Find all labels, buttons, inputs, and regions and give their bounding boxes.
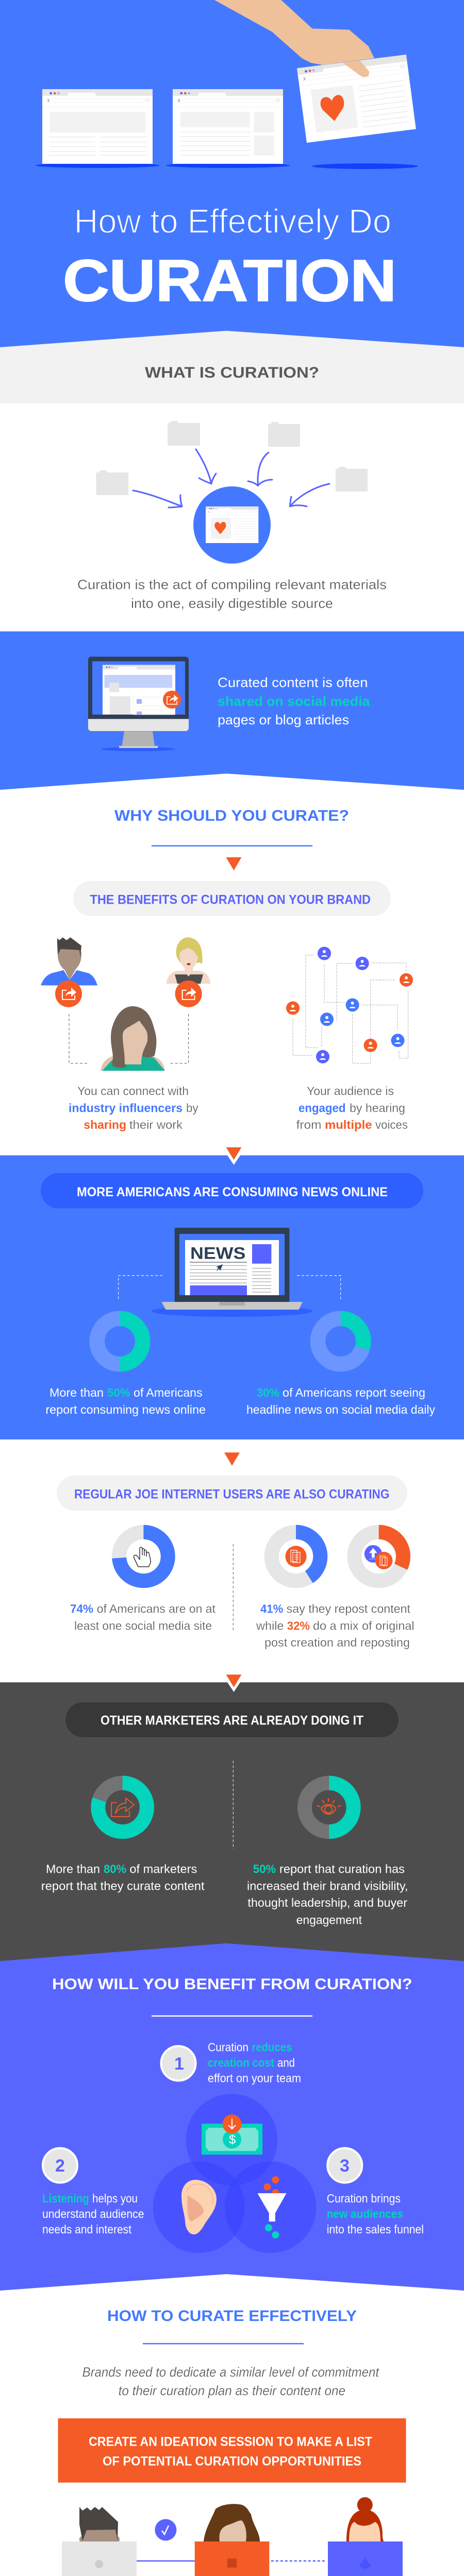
- panel: how will you benefit: [0, 1943, 464, 2291]
- pill: regular joe heading: [57, 1476, 407, 1511]
- chart: 32 percent donut: [354, 1532, 403, 1581]
- text: audience: Your audience is: [307, 1084, 394, 1097]
- arrow: down triangle: [226, 1674, 241, 1692]
- text: news stats: of Americans report seeing: [283, 1386, 425, 1399]
- icon: folders: [96, 421, 368, 495]
- illustration: publishers and you: [57, 2497, 407, 2576]
- icon: redhead at laptop: [323, 2497, 407, 2576]
- text: marketers stats: report that curation has: [279, 1862, 405, 1875]
- banner: ideation session: OF POTENTIAL CURATION OPPORTUNITIES: [103, 2454, 361, 2469]
- icon: share badges: [55, 980, 202, 1007]
- text: commitment note: [82, 2364, 380, 2398]
- icon: ear: [181, 2180, 217, 2234]
- heading: what is curation: WHAT IS CURATION?: [145, 364, 319, 381]
- icon: eye: [317, 1798, 341, 1814]
- text: influencers: sharing: [84, 1118, 126, 1131]
- benefit: number one: creation cost: [208, 2056, 274, 2069]
- text: regular joe stats: least one social media site: [74, 1619, 212, 1632]
- icon: browser window two: [173, 89, 283, 164]
- text: shared on social: Curated content is often: [218, 675, 368, 690]
- pill: benefits heading: [73, 881, 391, 916]
- benefit: number one: and: [277, 2056, 295, 2069]
- icon: pointer hand: [134, 1547, 151, 1567]
- text: commitment note: Brands need to dedicate a similar level of commitment: [82, 2364, 380, 2380]
- panel: hero background: [0, 0, 464, 403]
- text: marketers stats: engagement: [296, 1913, 362, 1927]
- icon: page in circle: [193, 486, 271, 564]
- icon: check badge: [155, 2519, 176, 2541]
- text: audience: voices: [375, 1118, 408, 1131]
- title: [63, 202, 396, 314]
- text: audience: [296, 1084, 408, 1131]
- text: marketers stats: 80%: [104, 1862, 126, 1875]
- icon: you woman: [101, 1006, 165, 1071]
- icon: share outline: [111, 1798, 134, 1817]
- text: news stats: [45, 1386, 435, 1416]
- chart: 41 percent donut: [272, 1532, 320, 1581]
- text: news stats: of Americans: [134, 1386, 203, 1399]
- pill: news heading: [41, 1173, 423, 1208]
- icon: hand palm: [214, 0, 374, 65]
- text: influencers: [69, 1084, 198, 1131]
- benefit: number one: 1: [174, 2054, 184, 2074]
- icon: money bill: [202, 2114, 262, 2155]
- benefit: number three: 3: [340, 2156, 350, 2176]
- text: regular joe stats: say they repost content: [287, 1602, 411, 1615]
- icon: blonde influencer: [167, 937, 210, 984]
- benefit: number three: [327, 2148, 424, 2236]
- panel: why should you curate: [41, 807, 413, 1131]
- panel: other marketers: [0, 1674, 464, 1961]
- benefit: number one: Curation: [208, 2040, 248, 2054]
- icon: finger: [343, 61, 369, 77]
- text: definition: [77, 577, 387, 611]
- pill: regular joe heading: REGULAR JOE INTERNET USERS ARE ALSO CURATING: [74, 1487, 389, 1502]
- panel: regular joe users: [57, 1452, 415, 1649]
- arrow: down triangle: [226, 857, 241, 871]
- chart: 50 percent donut: [305, 1783, 354, 1832]
- panel: curated content shared: [0, 632, 464, 790]
- chart: 30 percent donut: [318, 1318, 363, 1364]
- icon: you at laptop: [190, 2504, 274, 2576]
- text: regular joe stats: 74%: [70, 1602, 93, 1615]
- heading: how to curate: HOW TO CURATE EFFECTIVELY: [107, 2308, 357, 2325]
- text: regular joe stats: while: [256, 1619, 284, 1632]
- illustration: influencers: [41, 937, 210, 1071]
- text: definition: into one, easily digestible source: [131, 596, 333, 611]
- benefit: number one: effort on your team: [208, 2071, 301, 2084]
- benefit: number two: 2: [55, 2156, 65, 2176]
- text: influencers: industry influencers: [69, 1101, 183, 1114]
- banner: ideation session: [58, 2418, 406, 2483]
- text: news stats: 50%: [107, 1386, 130, 1399]
- chart: 80 percent donut: [98, 1783, 147, 1832]
- icon: funnel: [257, 2176, 287, 2239]
- text: news stats: 30%: [257, 1386, 279, 1399]
- text: audience: multiple: [325, 1118, 372, 1131]
- text: marketers stats: More than: [46, 1862, 100, 1875]
- text: influencers: You can connect with: [77, 1084, 189, 1097]
- pill: marketers heading: [65, 1702, 399, 1737]
- pill: news heading: MORE AMERICANS ARE CONSUMING NEWS ONLINE: [77, 1185, 388, 1199]
- text: news stats: headline news on social media daily: [246, 1403, 435, 1416]
- benefit: number three: Curation brings: [327, 2192, 401, 2205]
- text: news stats: report consuming news online: [45, 1403, 206, 1416]
- benefit: number one: [161, 2040, 301, 2084]
- pill: marketers heading: OTHER MARKETERS ARE ALREADY DOING IT: [101, 1714, 363, 1728]
- benefit: number three: new audiences: [327, 2207, 403, 2221]
- pill: benefits heading: THE BENEFITS OF CURATION ON YOUR BRAND: [90, 892, 371, 907]
- text: audience: from: [296, 1118, 321, 1131]
- banner: ideation session: CREATE AN IDEATION SESSION TO MAKE A LIST: [89, 2435, 372, 2449]
- text: shared on social: [218, 675, 370, 727]
- text: marketers stats: report that they curate content: [41, 1879, 205, 1892]
- icon: upload and repost: [364, 1545, 393, 1569]
- illustration: browser windows and hand: [36, 0, 418, 169]
- text: influencers: by: [186, 1101, 198, 1114]
- text: influencers: their work: [129, 1118, 183, 1131]
- icon: man influencer: [41, 937, 97, 986]
- text: marketers stats: 50%: [253, 1862, 276, 1875]
- text: definition: Curation is the act of compiling relevant materials: [77, 577, 387, 592]
- illustration: audience network: [286, 947, 413, 1063]
- heading: how will you benefit: HOW WILL YOU BENEFIT FROM CURATION?: [52, 1976, 412, 1993]
- icon: repost document: [285, 1546, 307, 1567]
- text: regular joe stats: 41%: [260, 1602, 283, 1615]
- title: CURATION: [63, 248, 396, 314]
- icon: laptop with news: [152, 1228, 312, 1317]
- benefit: number one: reduces: [252, 2040, 292, 2054]
- text: news stats: More than: [49, 1386, 104, 1399]
- benefit: number two: Listening: [42, 2192, 89, 2205]
- text: audience: by hearing: [350, 1101, 405, 1114]
- icon: window shadows: [36, 163, 418, 169]
- icon: tilted heart window: [297, 55, 416, 143]
- arrows: folders to page: [133, 449, 329, 507]
- icon: money bill: $: [229, 2133, 236, 2147]
- text: regular joe stats: do a mix of original: [313, 1619, 415, 1632]
- text: regular joe stats: of Americans are on at: [97, 1602, 216, 1615]
- text: marketers stats: of marketers: [129, 1862, 197, 1875]
- panel: americans consuming news: [0, 1147, 464, 1439]
- icon: man at laptop: [57, 2507, 141, 2576]
- icon: browser window one: [42, 89, 153, 164]
- benefit: number three: into the sales funnel: [327, 2223, 424, 2236]
- panel: how to curate effectively: [36, 2308, 429, 2576]
- text: shared on social: shared on social media: [218, 693, 370, 709]
- text: shared on social: pages or blog articles: [218, 712, 349, 727]
- text: regular joe stats: [70, 1602, 415, 1649]
- text: regular joe stats: 32%: [287, 1619, 310, 1632]
- arrow: down triangle: [226, 1147, 241, 1165]
- benefit: number two: needs and interest: [42, 2223, 132, 2236]
- text: marketers stats: increased their brand visibility,: [247, 1879, 408, 1892]
- arrow: down triangle: [224, 1452, 240, 1466]
- title: How to Effectively Do: [74, 202, 391, 240]
- text: marketers stats: thought leadership, and buyer: [247, 1896, 407, 1909]
- text: audience: engaged: [299, 1101, 345, 1114]
- chart: 50 percent donut: [97, 1318, 143, 1364]
- icon: desktop monitor: [88, 657, 189, 751]
- benefit: number two: helps you: [92, 2192, 138, 2205]
- text: marketers stats: [41, 1862, 408, 1927]
- heading: why curate: WHY SHOULD YOU CURATE?: [114, 807, 349, 824]
- connectors: [119, 1276, 341, 1300]
- illustration: venn circles: [153, 2094, 317, 2253]
- chart: 74 percent donut: [119, 1532, 168, 1581]
- benefit: number two: [42, 2148, 144, 2236]
- benefit: number two: understand audience: [42, 2207, 144, 2221]
- text: regular joe stats: post creation and reposting: [264, 1636, 410, 1649]
- icon: laptop with news: NEWS: [190, 1244, 245, 1263]
- panel: curation definition: [77, 421, 387, 611]
- text: commitment note: to their curation plan as their content one: [119, 2383, 345, 2398]
